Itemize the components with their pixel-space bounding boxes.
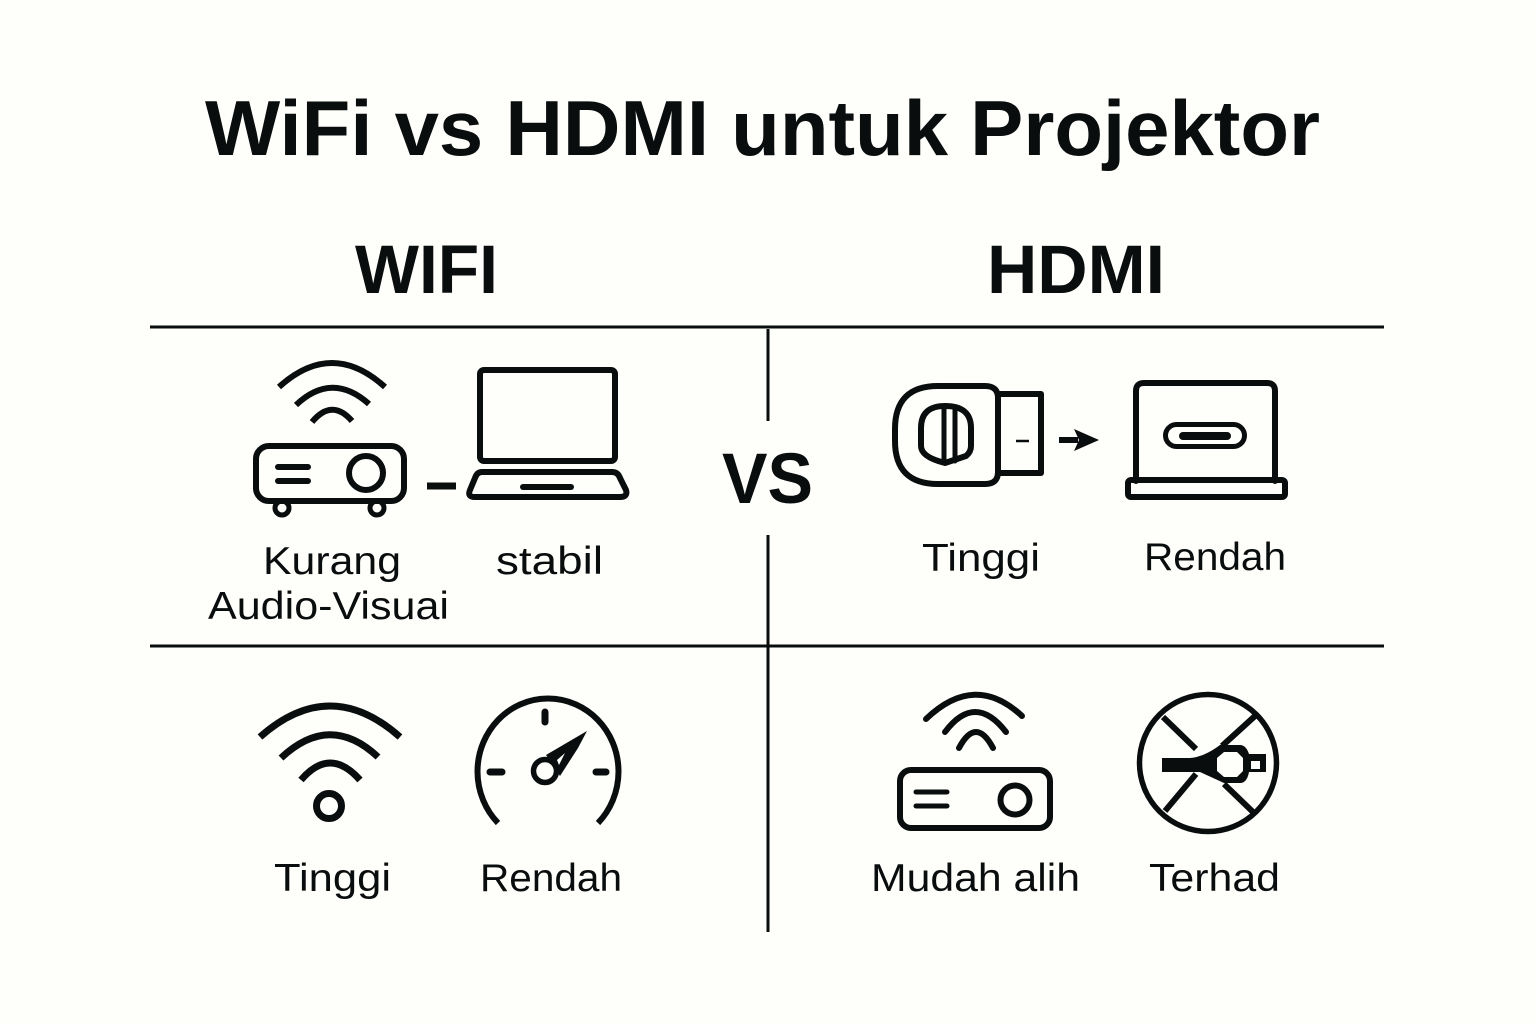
icon: laptop with HDMI port (1128, 383, 1285, 497)
icon: HDMI dongle (895, 386, 1041, 484)
VS label: VS (722, 440, 813, 519)
label: Tinggi: Tinggi (274, 857, 391, 900)
label: Mudah alih: Mudah alih (871, 857, 1080, 900)
connector dash (427, 482, 456, 490)
icon: speedometer (477, 699, 618, 823)
label: Tinggi: Tinggi (922, 537, 1040, 580)
icon: WiFi signal (260, 706, 400, 818)
label: Kurang Audio-Visuai: Audio-Visuai (208, 585, 449, 628)
icon: wireless projector (256, 363, 404, 515)
label: Kurang Audio-Visuai (208, 540, 449, 628)
heading: HDMI: HDMI (987, 231, 1165, 308)
icon: crossed-out cable (1140, 694, 1276, 832)
label: Rendah: Rendah (1144, 536, 1286, 579)
arrow (1059, 429, 1099, 451)
icon: router (900, 695, 1050, 828)
icon: laptop (469, 370, 626, 497)
label: Terhad: Terhad (1149, 857, 1280, 900)
label: stabil: stabil (496, 540, 603, 583)
label: Kurang Audio-Visuai: Kurang (263, 540, 401, 583)
heading: WIFI: WIFI (355, 231, 498, 308)
label: Rendah: Rendah (480, 857, 622, 900)
title: WiFi vs HDMI untuk Projektor (205, 84, 1320, 172)
